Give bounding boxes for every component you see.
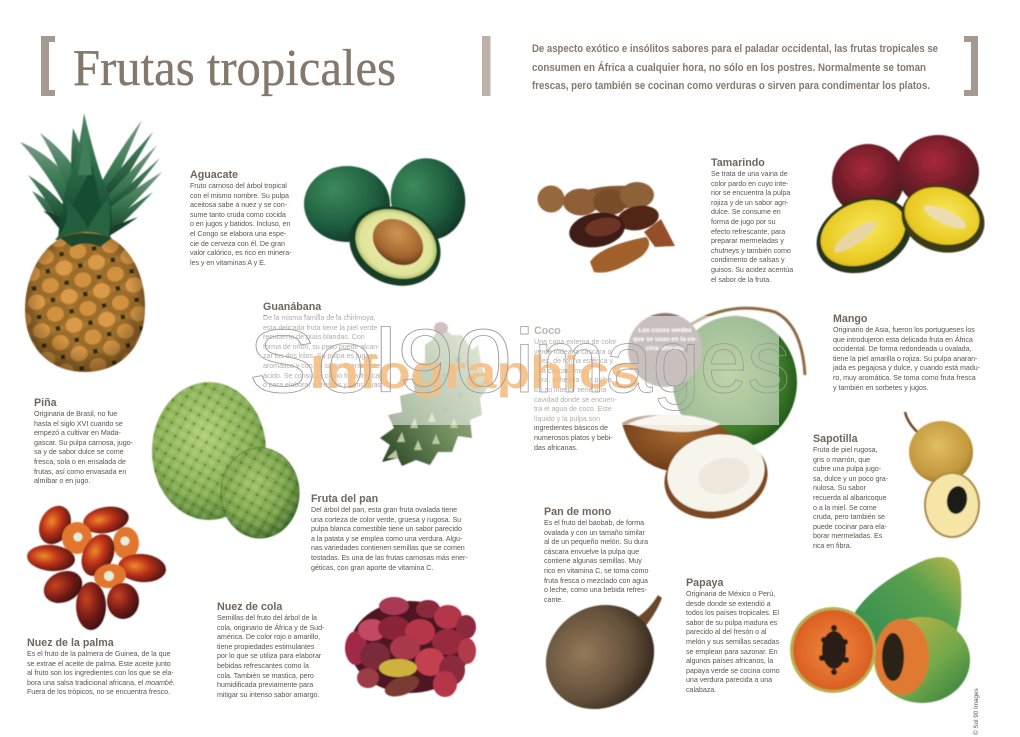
text block: Papaya: sabor de su pulpa madura es bbox=[686, 619, 777, 627]
text block: Piña bbox=[34, 397, 133, 485]
left title bracket bbox=[41, 36, 55, 96]
text block: Papaya: se emplean para sazonar. En bbox=[686, 648, 778, 656]
text block: Nuez de cola: cola, originario de África y de Sud- bbox=[217, 624, 324, 632]
text block: Papaya: todos los países tropicales. El bbox=[686, 609, 779, 617]
text block: Aguacate: valor calórico, es rico en minera- bbox=[190, 249, 291, 257]
text block: Mango: tiene la piel amarilla o rojiza. Su pulpa anaran- bbox=[833, 355, 977, 363]
text block: Piña: hasta el siglo XVI cuando se bbox=[34, 420, 123, 428]
text block: Tamarindo: Se trata de una vaina de bbox=[711, 170, 788, 178]
pineapple crown bbox=[20, 113, 162, 240]
text block: Papaya: una verdura parecida a una bbox=[686, 676, 772, 684]
callout circle: que se usan en la co- bbox=[633, 336, 697, 343]
text block: Nuez de la palma: Fuera de los trópicos, no se encuentra fresco. bbox=[27, 688, 170, 696]
intro paragraph: frescas, pero también se cocinan como verduras o sirven para condimentar los platos. bbox=[532, 80, 930, 92]
text block: Piña: fresca, sola o en ensalada de bbox=[34, 458, 126, 466]
text block: Papaya bbox=[686, 577, 780, 694]
text block: Coco: dura, adherida a la pulpa. bbox=[534, 376, 614, 384]
text block: Papaya: algunos países africanos, la bbox=[686, 657, 773, 665]
text block: Nuez de cola bbox=[217, 601, 324, 699]
text block: Tamarindo: chutneys y también como bbox=[711, 247, 791, 255]
text block: Mango: jada es pegajosa y dulce, y cuando está madu- bbox=[833, 364, 980, 372]
text block: Sapotilla: sa, dulce y un poco gra- bbox=[813, 475, 888, 483]
text block: Coco: nuez, de forma esférica y bbox=[534, 357, 613, 365]
intro paragraph: De aspecto exótico e insólitos sabores para el paladar occidental, las frutas tropicales se bbox=[532, 43, 938, 55]
text block: Papaya: Originaria de México o Perú, bbox=[686, 590, 775, 598]
fruit: baobab (pan de mono) bbox=[525, 584, 675, 730]
text block: Tamarindo: forma de jugo por su bbox=[711, 218, 776, 226]
text block: Papaya: calabaza. bbox=[686, 686, 716, 694]
translucent watermark band bbox=[262, 316, 779, 425]
text block: Sapotilla: puede cocinar para ela- bbox=[813, 523, 887, 531]
fruit: soursop (guanábana) bbox=[380, 322, 490, 466]
right title bracket bbox=[964, 36, 978, 96]
fruit: oil palm nuts bbox=[26, 501, 167, 630]
text block: Guanábana: zar los dos kilos. Su pulpa es jugosa, bbox=[263, 352, 379, 360]
text block: Mango: y también en sorbetes y jugos. bbox=[833, 384, 928, 392]
text block: Fruta del pan bbox=[311, 493, 468, 572]
text block: Papaya: melón y sus semillas secadas bbox=[686, 638, 779, 646]
text block: Coco: ingredientes básicos de bbox=[534, 424, 608, 432]
text block: Nuez de la palma bbox=[27, 637, 175, 696]
fruit: tamarind bbox=[538, 182, 675, 273]
text block: Tamarindo: preparar mermeladas y bbox=[711, 237, 784, 245]
watermark: orange Infographics: Infographics bbox=[310, 346, 640, 398]
text block: Nuez de cola: mitigar su intenso sabor amargo. bbox=[217, 691, 319, 699]
text block: Mango: occidental. De forma redondeada u ovalada, bbox=[833, 345, 971, 353]
fruit: cola nuts bbox=[345, 597, 476, 701]
text block: Nuez de cola: américa. De color rojo o amarillo, bbox=[217, 633, 320, 641]
text block: Nuez de cola: humidificada previamente para bbox=[217, 681, 313, 689]
text block: Papaya: Papaya bbox=[686, 577, 723, 589]
fruit: green coconut with opened halves bbox=[622, 308, 805, 528]
text block: Nuez de la palma: al fruto son los ingredientes con los que se ela- bbox=[27, 669, 174, 677]
text block: Sapotilla: rica en fibra. bbox=[813, 542, 852, 550]
text block: Piña: Piña bbox=[34, 397, 57, 409]
text block: Sapotilla: o a la miel. Se come bbox=[813, 504, 877, 512]
fruit: mango bbox=[805, 135, 992, 287]
watermark: outlined Sol90images: Sol90 bbox=[248, 312, 512, 412]
callout circle bbox=[628, 313, 702, 387]
watermark: outlined Sol90images: images bbox=[515, 312, 790, 412]
text block: Pan de mono: o leche, como una bebida refres- bbox=[544, 586, 647, 594]
text block: Fruta del pan: nas variedades contienen semillas que se comen bbox=[311, 544, 465, 552]
fruit: avocado bbox=[304, 150, 474, 300]
text block: Guanábana: De la misma familia de la chirimoya, bbox=[263, 314, 376, 322]
text block: Pan de mono: al de un pequeño melón. Su dura bbox=[544, 538, 648, 546]
text block: Aguacate: con el mismo nombre. Su pulpa bbox=[190, 192, 289, 200]
text block: Guanábana: esta delicada fruta tiene la piel verde bbox=[263, 324, 377, 332]
text block: Guanábana bbox=[263, 301, 383, 389]
text block: Aguacate: aceitosa sabe a nuez y se con- bbox=[190, 201, 287, 209]
text block: Guanábana: o para elaborar refrescos y conservas. bbox=[263, 381, 383, 389]
text block: Piña: almíbar o en jugo. bbox=[34, 477, 90, 485]
text block: Tamarindo: color pardo en cuyo inte- bbox=[711, 180, 788, 188]
fruit: papaya bbox=[790, 557, 970, 703]
text block: Tamarindo: condimento de salsas y bbox=[711, 256, 785, 264]
text block: Coco: líquido y la pulpa son bbox=[534, 415, 600, 423]
text block: Mango: que introdujeron esta delicada fruta en África bbox=[833, 336, 973, 344]
fruit: breadfruit bbox=[152, 382, 300, 538]
text block: Papaya: desde donde se extendió a bbox=[686, 600, 771, 608]
text block: Pan de mono: cante. bbox=[544, 596, 563, 604]
text block: Nuez de la palma: Es el fruto de la palmera de Guinea, de la que bbox=[27, 650, 170, 658]
text block: Tamarindo bbox=[711, 157, 794, 284]
text block: Sapotilla: Sapotilla bbox=[813, 433, 858, 445]
text block: Tamarindo: efecto refrescante, para bbox=[711, 228, 785, 236]
text block: Fruta del pan: tostadas. Es una de las frutas carnosas más ener- bbox=[311, 554, 468, 562]
text block: Nuez de cola: cola. También se mastica, pero bbox=[217, 672, 314, 680]
text block: Fruta del pan: Del árbol del pan, esta gran fruta ovalada tiene bbox=[311, 506, 457, 514]
text block: Pan de mono: cáscara envuelve la pulpa que bbox=[544, 548, 639, 556]
text block: Aguacate: Fruto carnoso del árbol tropical bbox=[190, 182, 287, 190]
text block: Sapotilla: cubre una pulpa jugo- bbox=[813, 465, 881, 473]
text block: Nuez de cola: por lo que se utiliza para elaborar bbox=[217, 652, 321, 660]
text block: Nuez de la palma: bora una salsa tradicional africana, el moambé. bbox=[27, 679, 175, 687]
text block: Nuez de la palma: se extrae el aceite de palma. Este aceite junto bbox=[27, 660, 171, 668]
text block: Papaya: papaya verde se cocina como bbox=[686, 667, 780, 675]
text block: Pan de mono: Pan de mono bbox=[544, 506, 611, 518]
text block: Piña: frutas, así como envasada en bbox=[34, 468, 126, 476]
text block: Sapotilla: recuerda al albaricoque bbox=[813, 494, 886, 502]
text block: Aguacate: les y en vitaminas A y E. bbox=[190, 259, 266, 267]
text block: Coco: Coco bbox=[534, 325, 561, 337]
callout circle: cina africana bbox=[646, 345, 685, 352]
text block: Aguacate: o en jugos y batidos. Incluso, en bbox=[190, 220, 290, 228]
text block: Coco bbox=[534, 325, 617, 452]
text block: Aguacate: cie de cerveza con él. De gran bbox=[190, 240, 285, 248]
header divider bar bbox=[482, 36, 490, 96]
text block: Mango: ro, muy aromática. Se toma como fruta fresca bbox=[833, 374, 976, 382]
text block: Piña: sa y de sabor dulce se come bbox=[34, 448, 124, 456]
text block: Coco: Una capa externa de color bbox=[534, 338, 617, 346]
text block: Coco: En su interior tiene una bbox=[534, 386, 606, 394]
text block: Coco: numerosos platos y bebi- bbox=[534, 434, 613, 442]
photo credit: © Sol 90 Images bbox=[972, 688, 980, 735]
text block: Tamarindo: rojiza y de un sabor agri- bbox=[711, 199, 788, 207]
text block: Guanábana: ácido. Se consume como fruta fresca bbox=[263, 372, 379, 380]
text block: Guanábana: recubierta de púas blandas. Con bbox=[263, 333, 365, 341]
text block: Tamarindo: Tamarindo bbox=[711, 157, 765, 169]
text block: Sapotilla bbox=[813, 433, 888, 550]
text block: Sapotilla: borar mermeladas. Es bbox=[813, 532, 882, 540]
text block: Sapotilla: Fruta de piel rugosa, bbox=[813, 446, 877, 454]
text block: Pan de mono: fruta fresca o mezclado con agua bbox=[544, 577, 648, 585]
title: Frutas tropicales bbox=[73, 40, 396, 97]
text block: Aguacate bbox=[190, 169, 292, 267]
text block: Coco: verde rodea la cáscara o bbox=[534, 348, 611, 356]
text block: Mango: Originario de Asia, fueron los portugueses los bbox=[833, 326, 975, 334]
text block: Guanábana: Guanábana bbox=[263, 301, 321, 313]
text block: Nuez de cola: tiene propiedades estimulantes bbox=[217, 643, 314, 651]
text block: Coco: una cáscara muy bbox=[534, 367, 588, 375]
text block: Mango: Mango bbox=[833, 313, 867, 325]
text block: Aguacate: sume tanto cruda como cocida bbox=[190, 211, 286, 219]
text block: Piña: empezó a cultivar en Mada- bbox=[34, 429, 121, 437]
text block: Pan de mono: Es el fruto del baobab, de forma bbox=[544, 519, 644, 527]
fruit: pineapple bbox=[20, 113, 162, 378]
text block: Fruta del pan: Fruta del pan bbox=[311, 493, 378, 505]
text block: Tamarindo: rior se encuentra la pulpa bbox=[711, 189, 790, 197]
text block: Nuez de la palma: Nuez de la palma bbox=[27, 637, 114, 649]
text block: Piña: Originaria de Brasil, no fue bbox=[34, 410, 117, 418]
text block: Nuez de cola: Nuez de cola bbox=[217, 601, 282, 613]
text block: Coco: cavidad donde se encuen- bbox=[534, 396, 617, 404]
text block: Pan de mono: rico en vitamina C, se toma como bbox=[544, 567, 648, 575]
text block: Fruta del pan: a la patata y se emplea como una verdura. Algu- bbox=[311, 535, 462, 543]
text block: Pan de mono bbox=[544, 506, 648, 604]
text block: Nuez de cola: bebidas refrescantes como la bbox=[217, 662, 309, 670]
text block: Tamarindo: el sabor de la fruta. bbox=[711, 276, 771, 284]
pineapple body bbox=[24, 231, 146, 373]
text block: Guanábana: forma de riñón, su peso puede alcan- bbox=[263, 343, 380, 351]
text block: Fruta del pan: géticas, con gran aporte de vitamina C. bbox=[311, 564, 433, 572]
text block: Aguacate: Aguacate bbox=[190, 169, 238, 181]
text block: Piña: gascar. Su pulpa carnosa, jugo- bbox=[34, 439, 133, 447]
text block: Fruta del pan: una corteza de color verde, gruesa y rugosa. Su bbox=[311, 516, 461, 524]
text block: Papaya: parecido al del fresón o al bbox=[686, 628, 766, 636]
text block: Sapotilla: nulosa. Su sabor bbox=[813, 484, 866, 492]
text block: Nuez de cola: Semillas del fruto del árbol de la bbox=[217, 614, 317, 622]
intro paragraph: consumen en África a cualquier hora, no sólo en los postres. Normalmente se toman bbox=[532, 61, 926, 74]
callout circle: Los cocos verdes bbox=[638, 327, 692, 334]
text block: Pan de mono: ovalada y con un tamaño similar bbox=[544, 529, 645, 537]
text block: Aguacate: el Congo se elabora una espe- bbox=[190, 230, 286, 238]
text block: Pan de mono: contiene algunas semillas. Muy bbox=[544, 557, 642, 565]
text block: Tamarindo: dulce. Se consume en bbox=[711, 208, 781, 216]
text block: Coco: tra el agua de coco. Este bbox=[534, 405, 612, 413]
text block: Guanábana: aromática y con un sabor ligeramente bbox=[263, 362, 381, 370]
fruit: sapodilla bbox=[905, 412, 980, 538]
text block: Coco: das africanas. bbox=[534, 444, 578, 452]
text block: Mango bbox=[832, 313, 980, 392]
text block: Tamarindo: guisos. Su acidez acentúa bbox=[711, 266, 793, 274]
watermark: outlined Sol90images bbox=[248, 312, 790, 412]
text block: Fruta del pan: pulpa blanca comestible tiene un sabor parecido bbox=[311, 525, 462, 533]
intro paragraph bbox=[532, 43, 938, 92]
text block: Sapotilla: gris o marrón, que bbox=[813, 456, 870, 464]
text block: Sapotilla: cruda, pero también se bbox=[813, 513, 885, 521]
